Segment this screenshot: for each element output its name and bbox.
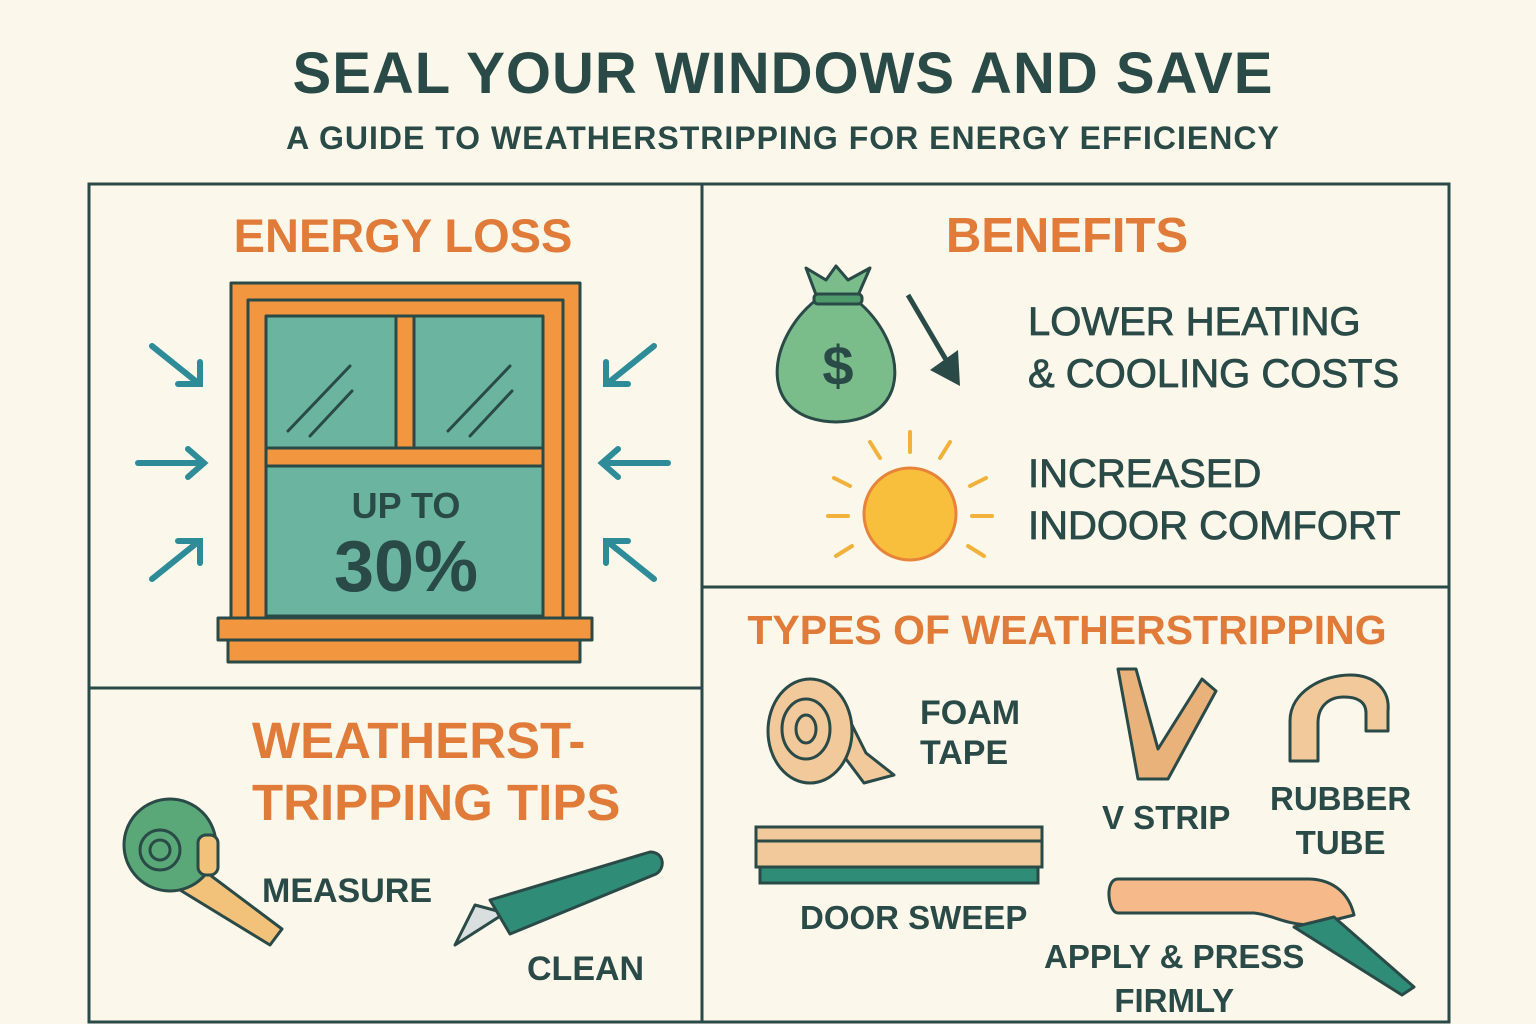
icon: applying hand [1107, 878, 1416, 996]
icon: sun [826, 430, 994, 562]
icon: tape measure [122, 798, 284, 946]
text: v strip: V STRIP [1102, 799, 1230, 836]
panel: types of weatherstripping [747, 607, 1416, 1019]
title: SEAL YOUR WINDOWS AND SAVE [293, 41, 1273, 106]
icon: down arrow [906, 294, 960, 386]
subtitle: A GUIDE TO WEATHERSTRIPPING FOR ENERGY EFFICIENCY [286, 120, 1280, 156]
heading: benefits: BENEFITS [946, 209, 1188, 263]
icon: window with arrows: 30% [334, 527, 478, 607]
heading: types: TYPES OF WEATHERSTRIPPING [747, 607, 1387, 653]
text: lower costs: LOWER HEATING [1028, 300, 1361, 344]
text: rubber tube: TUBE [1296, 824, 1386, 861]
panel: energy loss [135, 209, 671, 664]
text: apply: FIRMLY [1114, 982, 1234, 1019]
text: foam tape: FOAM [920, 694, 1020, 732]
icon: window with arrows [135, 282, 671, 664]
heading: tips: TRIPPING TIPS [252, 774, 620, 831]
icon: foam tape [766, 678, 896, 784]
text: comfort: INDOOR COMFORT [1028, 504, 1401, 548]
text: door sweep: DOOR SWEEP [800, 899, 1027, 936]
text: apply: APPLY & PRESS [1044, 938, 1304, 975]
text: comfort [1028, 452, 1401, 548]
icon: window with arrows: UP TO [352, 485, 460, 526]
text: lower costs: & COOLING COSTS [1028, 352, 1399, 396]
icon: v strip [1116, 668, 1218, 780]
text: rubber tube [1270, 780, 1411, 861]
panel: weatherstripping tips [122, 712, 664, 988]
heading: energy loss: ENERGY LOSS [234, 209, 572, 262]
icon: door sweep [754, 826, 1044, 884]
icon: utility knife [454, 850, 664, 947]
icon: rubber tube [1288, 674, 1390, 762]
text: foam tape: TAPE [920, 734, 1008, 772]
heading: tips: WEATHERST- [252, 712, 585, 769]
heading: tips [252, 712, 620, 831]
text: clean: CLEAN [527, 950, 644, 988]
text: rubber tube: RUBBER [1270, 780, 1411, 817]
panel: benefits [776, 209, 1401, 562]
text: comfort: INCREASED [1028, 452, 1261, 496]
icon: money bag [776, 264, 896, 424]
text: apply [1044, 938, 1304, 1019]
text: foam tape [920, 694, 1020, 772]
icon: money bag: $ [822, 334, 854, 397]
text: lower costs [1028, 300, 1399, 396]
text: measure: MEASURE [262, 872, 432, 910]
